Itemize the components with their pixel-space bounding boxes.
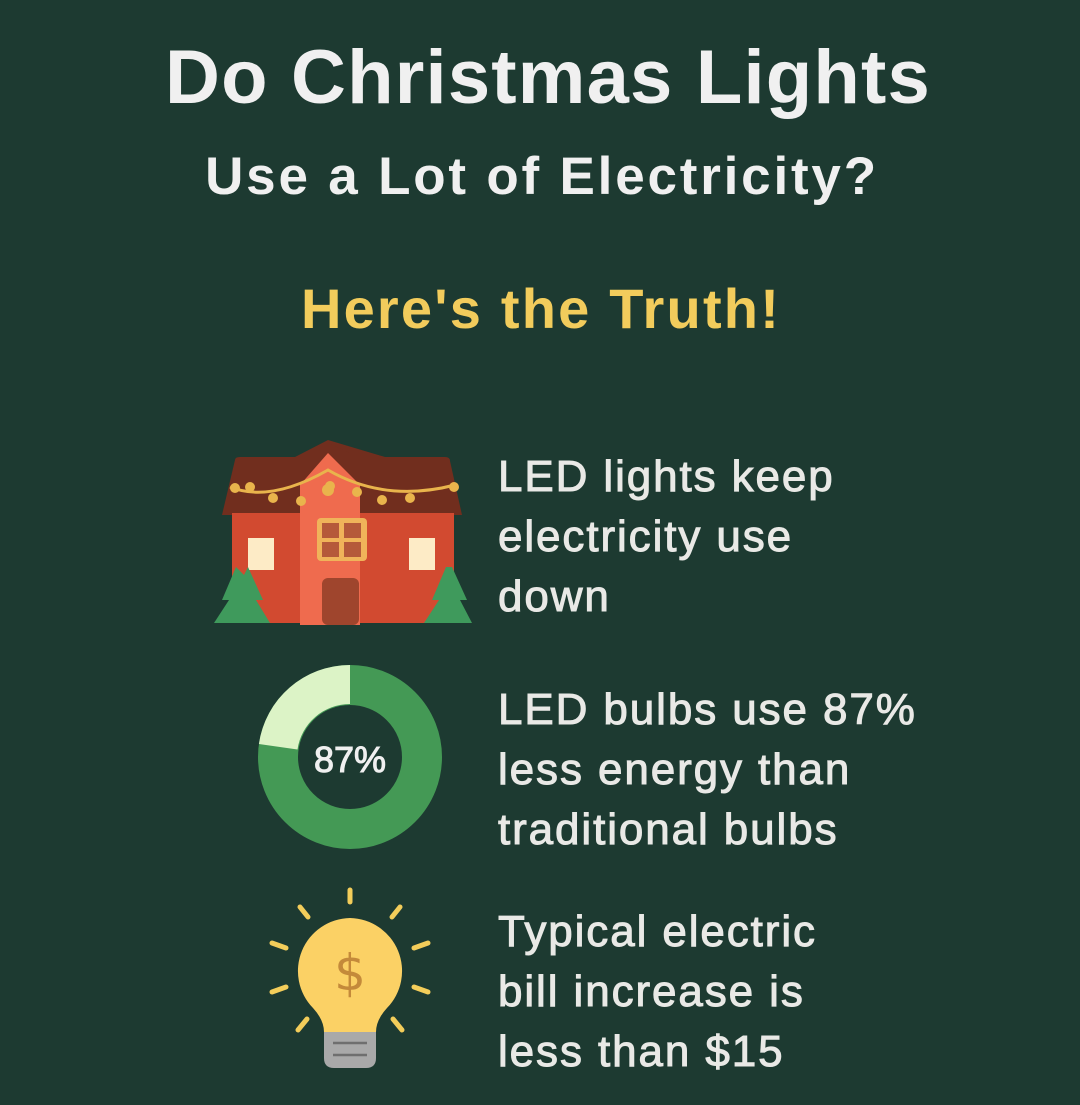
text: LED bulbs: LED bulbs use 87% [498, 685, 917, 734]
title: Do Christmas Lights [165, 35, 931, 120]
chart: donut 87% [258, 665, 442, 849]
text: LED bulbs [498, 685, 917, 854]
text: LED lights: electricity use [498, 512, 793, 561]
subtitle: Use a Lot of Electricity? [205, 147, 879, 206]
text: electric bill: less than $15 [498, 1027, 784, 1076]
icon: bulb with dollar: $ [334, 944, 366, 1002]
text: LED lights: down [498, 572, 611, 621]
text: electric bill: bill increase is [498, 967, 805, 1016]
tagline: Here's the Truth! [301, 277, 781, 340]
text: LED lights [498, 452, 835, 621]
text: LED bulbs: less energy than [498, 745, 851, 794]
icon: house [214, 440, 472, 625]
text: electric bill [498, 907, 817, 1076]
text: LED lights: LED lights keep [498, 452, 835, 501]
text: electric bill: Typical electric [498, 907, 817, 956]
chart: donut 87%: 87% [314, 739, 386, 780]
text: LED bulbs: traditional bulbs [498, 805, 838, 854]
icon: bulb with dollar [270, 888, 430, 1068]
